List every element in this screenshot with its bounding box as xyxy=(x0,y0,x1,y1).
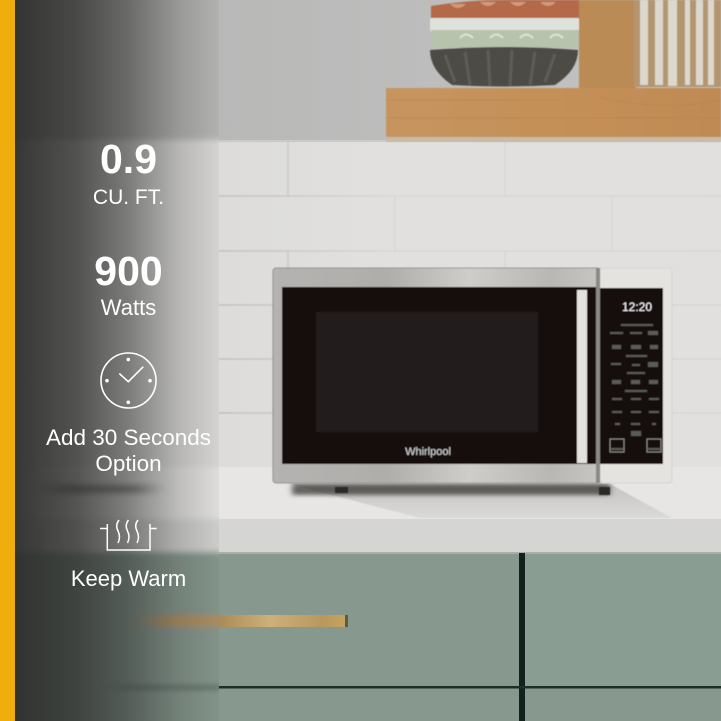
stat: wattage xyxy=(94,248,163,320)
yellow accent bar xyxy=(0,0,15,721)
frosted left panel xyxy=(15,0,219,721)
stat: capacity: 0.9 xyxy=(100,136,157,182)
shelf with bowls and vase xyxy=(386,0,721,142)
right control side xyxy=(600,268,672,483)
feature label: add 30 seconds: Option xyxy=(95,451,162,476)
control panel xyxy=(600,288,663,464)
tile grout lines xyxy=(219,141,721,413)
stacked bowls xyxy=(430,0,579,86)
wood back panel xyxy=(579,0,636,88)
stat: wattage: 900 xyxy=(94,248,163,294)
cabinet doors xyxy=(218,552,721,721)
vase xyxy=(634,0,721,87)
door handle xyxy=(577,290,587,463)
microwave xyxy=(273,268,672,495)
icon: clock xyxy=(101,353,156,408)
feature label: add 30 seconds xyxy=(46,425,211,476)
brass handle xyxy=(218,615,348,627)
light fade over right tiles xyxy=(219,142,721,467)
feet xyxy=(335,487,610,495)
blurred background xyxy=(56,138,219,692)
wooden shelf xyxy=(386,88,721,142)
stat: wattage: Watts xyxy=(101,295,156,320)
clock display: 12:20 xyxy=(622,300,652,314)
cancel and start buttons xyxy=(610,439,661,452)
door window surround xyxy=(282,287,596,464)
stat: capacity: CU. FT. xyxy=(93,186,164,209)
Whirlpool logo: Whirlpool xyxy=(405,446,451,458)
dark gradient overlay xyxy=(15,0,219,721)
body frame xyxy=(273,268,600,483)
feature label: keep warm: Keep Warm xyxy=(71,566,186,591)
microwave shadow on counter xyxy=(289,484,672,518)
window mesh xyxy=(316,312,538,432)
door seam xyxy=(596,268,600,483)
stat: capacity xyxy=(93,136,164,209)
feature label: add 30 seconds: Add 30 Seconds xyxy=(46,425,211,450)
icon: steaming pot xyxy=(100,520,157,550)
